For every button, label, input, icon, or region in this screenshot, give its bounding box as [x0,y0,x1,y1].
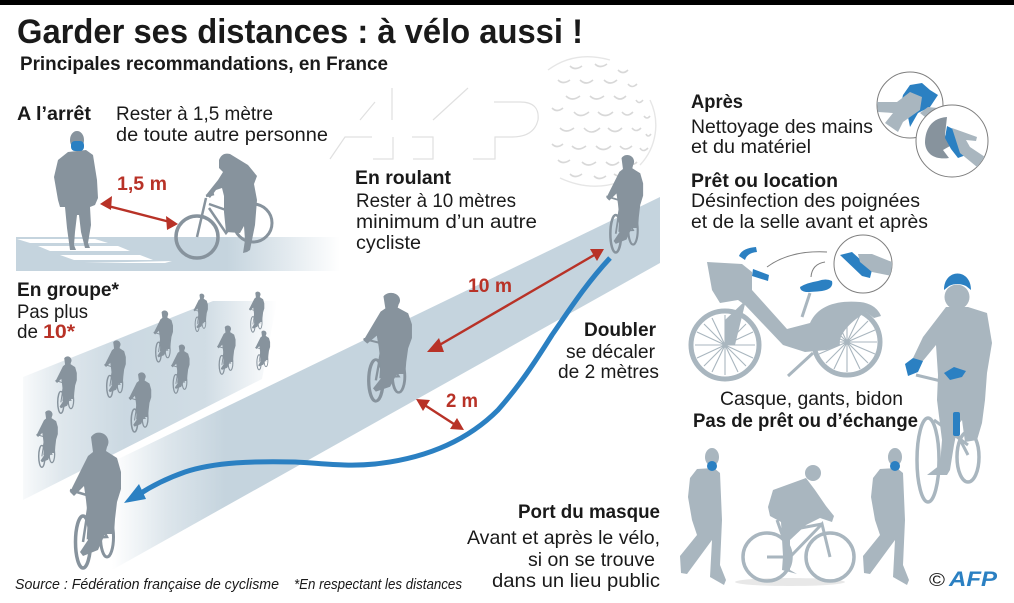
copyright AFP logo: AFP [948,568,998,591]
text: pret ou location [691,170,928,233]
walker with mask left [680,448,726,585]
text: port du masque: Port du masque [518,501,660,523]
text: port du masque: Avant et après le vélo, [467,527,660,549]
distance arrow 2 m [416,391,478,430]
icon: hand disinfecting [834,235,892,293]
distance arrow 2 m: 2 m [446,391,478,412]
text: en roulant [355,167,537,254]
text: doubler: Doubler [584,319,656,341]
cyclist stopped [176,154,272,258]
copyright AFP logo: © [929,570,945,590]
title: Garder ses distances : à vélo aussi ! [17,13,583,51]
ground strip [16,237,340,271]
AFP watermark [330,88,538,159]
subtitle: Principales recommandations, en France [20,54,388,75]
text: casque, gants, bidon: Casque, gants, bidon [720,388,903,410]
text: casque, gants, bidon: Pas de prêt ou d’échange [693,410,918,432]
description: Rester à 1,5 mètre [116,103,273,125]
description: de toute autre personne [116,124,328,146]
source note: Source : Fédération française de cyclisme [15,576,279,593]
top black bar [0,0,1014,5]
pointer lines to bike [767,252,827,277]
cyclist front foreground [70,433,121,568]
text: en groupe: de [17,321,38,343]
distance arrow 10 m [427,249,604,352]
cyclist middle on road [364,293,412,401]
distance arrow 10 m: 10 m [468,276,512,297]
text: port du masque: dans un lieu public [492,570,660,592]
distance arrow 1,5 m: 1,5 m [117,174,167,195]
text: en groupe: En groupe* [17,279,119,301]
crosswalk [17,239,172,263]
text: port du masque: si on se trouve [528,549,655,571]
golf ball watermark [548,57,656,186]
walker with mask right [863,448,909,585]
panel: main road [112,197,660,570]
text: en roulant: minimum d’un autre [356,211,537,233]
group of ten cyclists [36,292,270,467]
cyclist with helmet, gloves and bottle [905,274,992,502]
heading: A l’arrêt [17,104,92,125]
rental city bike [691,247,881,379]
text: apres: Après [691,91,743,113]
text: en groupe [17,279,119,343]
text: apres: Nettoyage des mains [691,116,873,138]
footnote: *En respectant les distances [294,576,462,593]
blue overtaking arrow [124,258,610,503]
text: en groupe: Pas plus [17,301,88,323]
icon: helmet cleaning [916,105,988,177]
copyright AFP logo [929,568,998,591]
text: pret ou location: Prêt ou location [691,170,838,192]
text: en roulant: En roulant [355,167,451,189]
pedestrian with mask [54,131,98,250]
description [116,103,328,146]
text: pret ou location: Désinfection des poignées [691,190,920,212]
text: apres [691,91,873,158]
text: en roulant: Rester à 10 mètres [356,190,516,212]
cyclist ahead on road [606,155,643,252]
text: casque, gants, bidon [693,388,918,432]
text: doubler [558,319,659,383]
text: apres: et du matériel [691,136,811,158]
road cyclist center [735,465,854,586]
text: en groupe: 10* [43,321,75,343]
text: doubler: se décaler [566,341,656,363]
text: port du masque [467,501,660,592]
text: doubler: de 2 mètres [558,361,659,383]
panel: group road [23,301,277,500]
text: en roulant: cycliste [356,232,421,254]
distance arrow 1,5 m [100,174,178,230]
icon: hands cleaning [877,72,943,138]
text: pret ou location: et de la selle avant et après [691,211,928,233]
panel: a l'arret [16,103,340,271]
